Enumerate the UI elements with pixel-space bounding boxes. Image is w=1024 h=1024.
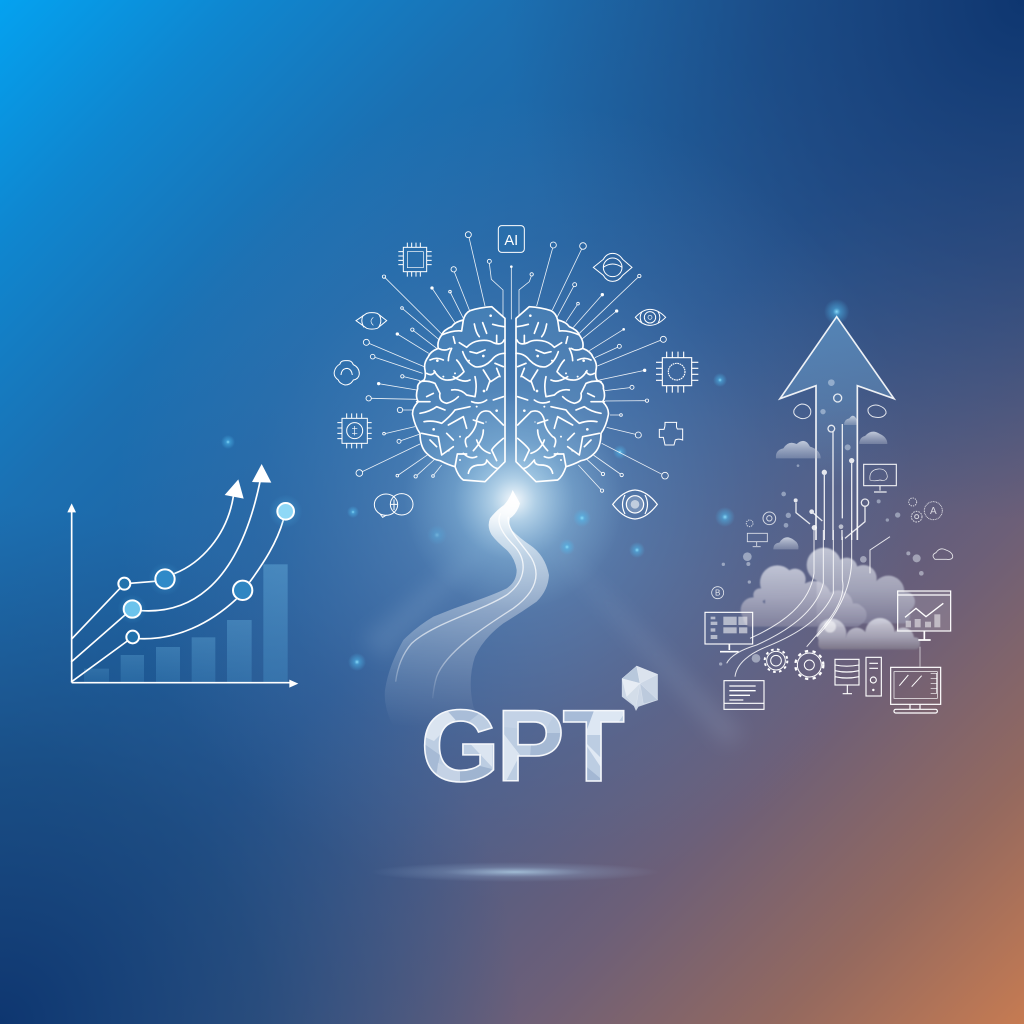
ribbon strands [396, 513, 536, 698]
bars [84, 564, 288, 682]
left cloud [741, 565, 867, 627]
solid clouds [776, 416, 887, 458]
icon: eye right [635, 309, 666, 325]
icon: chip right [656, 352, 698, 393]
gears [765, 649, 823, 679]
growth arrow [746, 299, 942, 540]
chart nodes [118, 495, 302, 643]
icon: monitor with cycle [864, 464, 896, 492]
neural rays [362, 237, 662, 490]
cloud bright spot [824, 621, 836, 633]
icon: speech bubbles [374, 494, 413, 517]
gem icon [622, 666, 658, 711]
arrowheads [225, 464, 271, 499]
ray end nodes [356, 232, 668, 492]
icon: coin [712, 587, 724, 599]
arrow tip glow [824, 299, 849, 324]
monitor bottom [891, 667, 941, 713]
right hemisphere [516, 307, 608, 482]
hot glow under brain [404, 390, 624, 610]
floating particles [719, 551, 924, 666]
icon: AI badge: AI [504, 233, 518, 249]
icon: AI badge [498, 226, 524, 252]
arrow body [780, 317, 894, 540]
cloud stack and devices [705, 530, 953, 713]
arrow outline [780, 317, 894, 540]
icon: cross cloud [659, 422, 683, 445]
icon: small cloud upper right [933, 549, 953, 559]
monitor left dashboard [705, 612, 753, 652]
icon: cloud left [334, 361, 359, 385]
light rays [360, 520, 745, 745]
small gear and letter badges [746, 498, 942, 527]
icon: small monitor and cloud upper left [747, 533, 798, 549]
axes [67, 503, 298, 688]
floor light reflection [370, 862, 660, 882]
icon: chip left [337, 413, 372, 448]
data flow curves [727, 530, 920, 677]
laptop panel [724, 681, 764, 709]
front cloud right [817, 618, 920, 649]
icon: eye left [356, 313, 387, 329]
small gear and letter badges: A [930, 506, 937, 517]
glow sparkles [221, 373, 735, 671]
flowing light ribbon [385, 490, 549, 727]
tower computer [866, 657, 881, 696]
left hemisphere [413, 307, 505, 482]
ribbon body [385, 490, 549, 727]
brain with neural rays [334, 226, 698, 519]
icon: eye top right [593, 253, 632, 281]
server stack [835, 659, 859, 694]
outline clouds [794, 404, 886, 419]
GPT wordmark: GPT [420, 689, 625, 803]
growth line chart [67, 464, 302, 688]
icon: coin: B [715, 589, 720, 598]
monitor right chart [898, 591, 951, 640]
back cloud right [807, 548, 915, 625]
icon: chip top left [398, 243, 432, 277]
icon: eye bottom right [613, 490, 657, 519]
arrow inner circuit lines [781, 379, 900, 540]
trend curves [72, 482, 283, 682]
